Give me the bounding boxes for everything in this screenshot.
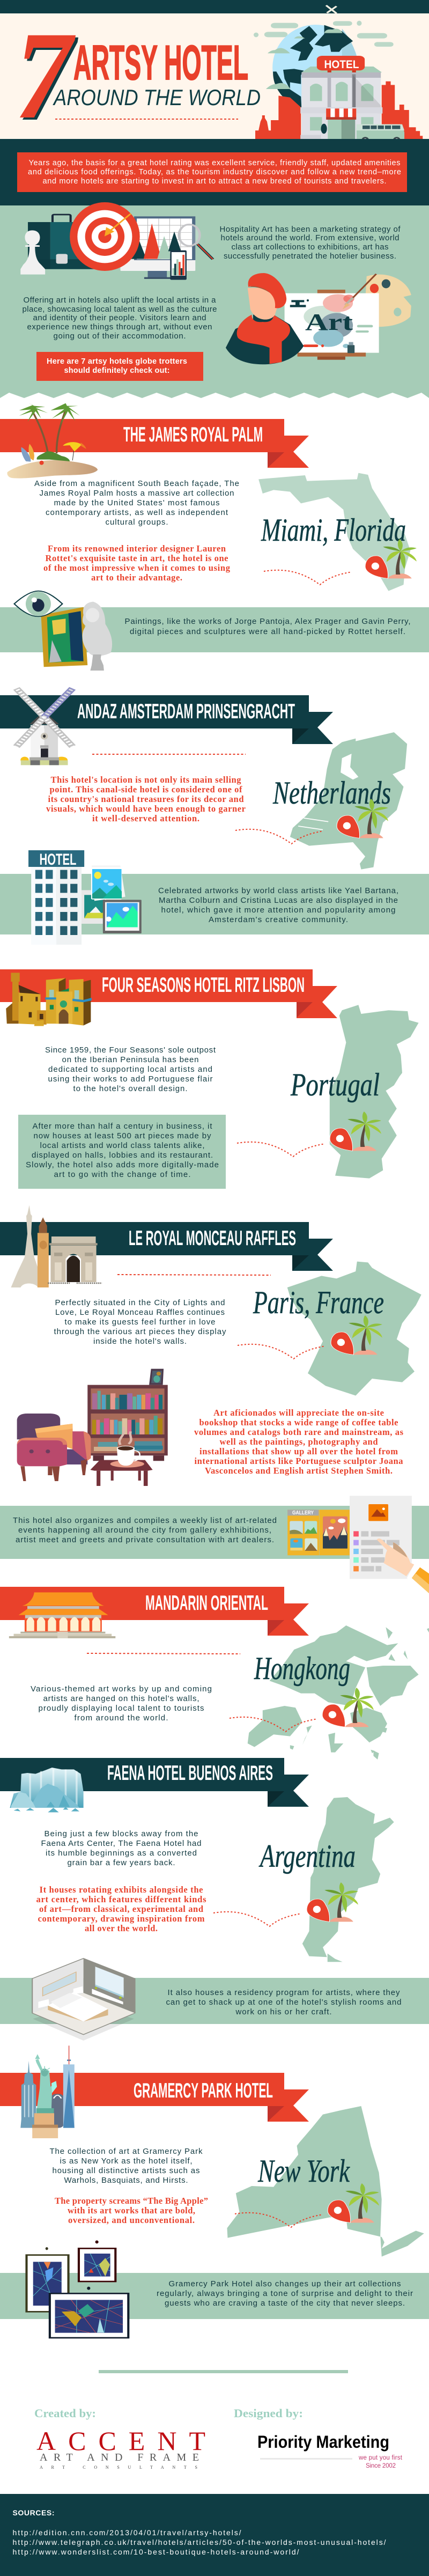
- text: hospitality art: [220, 225, 401, 261]
- intro callout: and delicious food offerings. Today, as the tourism industry discover and follow a new trend–more: [28, 168, 401, 176]
- map pin with palm: [330, 1112, 381, 1151]
- intro callout: and more hotels are starting to invest in art to attract a new breed of tourists and travelers.: [43, 177, 386, 186]
- text: canal-side highlight: its country's national treasures for its decor and: [48, 794, 243, 804]
- text panel: half a century: Slowly, the hotel also adds more digitally-made: [26, 1160, 219, 1169]
- text: celebrated artworks: Celebrated artworks by world class artists like Yael Bartana,: [158, 886, 398, 895]
- text: james royal palm intro: Aside from a magnificent South Beach façade, The: [34, 479, 239, 488]
- banner: faena hotel buenos aires: [0, 1758, 309, 1807]
- text: art aficionados highlight: international artists like Portuguese sculptor Joana: [194, 1456, 403, 1466]
- text: city of lights: through the various art pieces they display: [54, 1327, 226, 1336]
- green band: celebrated artworks: [0, 874, 429, 934]
- dotted route: [237, 1142, 323, 1157]
- text: four seasons intro: Since 1959, the Four Seasons' sole outpost: [45, 1046, 216, 1055]
- location name: portugal: Portugal: [290, 1067, 380, 1102]
- text: residency program: can get to shack up at one of the hotel's stylish rooms and: [166, 1998, 401, 2007]
- text: big apple highlight: The property screams “The Big Apple”: [55, 2196, 208, 2206]
- footer: sources: http://www.telegraph.co.uk/travel/hotels/articles/50-of-the-worlds-most-unusual-hotels/: [13, 2538, 386, 2546]
- text: rotating exhibits highlight: [36, 1885, 206, 1933]
- cream title panel: [0, 13, 429, 139]
- intro callout: [17, 152, 407, 192]
- dashed divider: [55, 119, 238, 120]
- green band: weekly art events: [0, 1506, 429, 1559]
- green band: changing collections: [0, 2273, 429, 2319]
- text: celebrated artworks: [158, 886, 398, 924]
- section: andaz amsterdam prinsengracht: [0, 688, 429, 945]
- label: designed by: Designed by:: [234, 2406, 303, 2420]
- text: james royal palm intro: cultural groups.: [105, 518, 168, 527]
- banner: gramercy park hotel: [0, 2073, 309, 2122]
- footer: sources: http://edition.cnn.com/2013/04/01/travel/artsy-hotels/: [13, 2528, 241, 2537]
- text: rotating exhibits highlight: contemporary, drawing inspiration from: [38, 1913, 205, 1924]
- text panel: half a century: art to go with the change of time.: [54, 1170, 191, 1179]
- illustration: castle: [6, 973, 92, 1026]
- illustration: eye, painting and statue: [14, 591, 112, 671]
- text: offering art: going out of their accommodation.: [54, 332, 186, 341]
- text: lauren rottet highlight: From its renowned interior designer Lauren: [48, 543, 226, 554]
- banner: andaz amsterdam prinsengracht: [0, 695, 333, 744]
- text: residency program: work on his or her craft.: [235, 2007, 331, 2016]
- text: celebrated artworks: hotel, which gave it more attention and popularity among: [161, 906, 396, 915]
- text: lauren rottet highlight: [43, 543, 231, 583]
- logo: accent art and frame: ART CONSULTANTS: [40, 2465, 197, 2470]
- text: faena arts center: Being just a few blocks away from the: [44, 1829, 198, 1838]
- map: florida: [258, 473, 410, 591]
- title number 7: 7: [18, 8, 78, 147]
- text: city of lights: Perfectly situated in the City of Lights and: [55, 1298, 225, 1307]
- illustration: gallery brochure and hand: [287, 1496, 429, 1599]
- text: james royal palm intro: [34, 479, 239, 527]
- illustration: globe, hotel, skyline and van: HOTEL: [324, 58, 359, 71]
- logo: priority marketing: Since 2002: [366, 2463, 396, 2469]
- text: various-themed art: proudly displaying local talent to tourists: [39, 1704, 204, 1713]
- text: art aficionados highlight: volumes and catalogs both rare and mainstream, as: [194, 1427, 404, 1437]
- text: big apple highlight: oversized, and unconventional.: [68, 2215, 195, 2225]
- text: city of lights: to make its guests feel further in love: [64, 1318, 216, 1327]
- map: france: [287, 1262, 421, 1396]
- map pin with palm: [307, 1882, 358, 1922]
- text: hospitality art: Hospitality Art has been a marketing strategy of: [220, 225, 401, 234]
- text: james royal palm intro: contemporary artists, as well as independent: [46, 508, 228, 517]
- text: art aficionados highlight: bookshop that stocks a wide range of coffee table: [199, 1417, 398, 1427]
- dotted route: [230, 1717, 316, 1732]
- dotted route: [235, 829, 322, 844]
- text: canal-side highlight: [46, 775, 246, 823]
- logo: accent art and frame: ACCENT: [36, 2426, 205, 2456]
- text: city of lights: inside the hotel's walls.: [93, 1337, 187, 1346]
- map pin with palm: [322, 1688, 374, 1727]
- text: various-themed art: [31, 1684, 212, 1723]
- subtitle: around the world: AROUND THE WORLD: [52, 85, 261, 110]
- illustration: hotel tower and photos: HOTEL: [40, 851, 76, 869]
- text panel: half a century: local artists and world class talents alike,: [40, 1141, 205, 1150]
- illustration: bookshelf, armchair and coffee: [17, 1369, 168, 1486]
- map: argentina: [302, 1797, 394, 1962]
- footer: sources: [0, 2494, 429, 2576]
- map: hong kong: [248, 1625, 429, 1760]
- text: four seasons intro: on the Iberian Peninsula has been: [62, 1055, 198, 1064]
- text: faena arts center: grain bar a few years back.: [68, 1858, 175, 1867]
- text: four seasons intro: to the hotel's overall design.: [73, 1084, 188, 1093]
- logo: accent art and frame: [36, 2426, 205, 2470]
- text: weekly art events: This hotel also organizes and compiles a weekly list of art-related: [13, 1516, 277, 1525]
- illustration: paris monuments: [11, 1205, 102, 1287]
- map pin with palm: [365, 539, 417, 578]
- text: gramercy collection: housing all distinctive artists such as: [53, 2166, 199, 2175]
- illustration: new york landmarks: [20, 2045, 75, 2138]
- logo: accent art and frame: ART AND FRAME: [40, 2452, 199, 2463]
- top dark bar: [0, 0, 429, 13]
- text: changing collections: regularly, always bringing a tone of surprise and delight to their: [157, 2289, 413, 2298]
- green band: residency program: [0, 1978, 429, 2024]
- map: new york: [227, 2106, 424, 2257]
- text: faena arts center: its humble beginnings as a converted: [46, 1849, 197, 1858]
- banner: the james royal palm: THE JAMES ROYAL PALM: [123, 423, 263, 446]
- dotted route: [235, 2213, 321, 2227]
- dashed divider: [87, 1653, 240, 1654]
- text: offering art: and identity of their people. Visitors learn and: [33, 313, 206, 322]
- label: created by: Created by:: [34, 2406, 96, 2420]
- location name: netherlands: Netherlands: [272, 775, 391, 811]
- logo: priority marketing: we put you first: [358, 2455, 403, 2461]
- text: paintings: [124, 617, 411, 636]
- section: gramercy park hotel: [0, 2045, 429, 2338]
- banner: four seasons hotel ritz lisbon: [0, 969, 337, 1018]
- footer: sources: SOURCES:: [13, 2508, 55, 2517]
- text: city of lights: [54, 1298, 226, 1346]
- text: james royal palm intro: made by the United States' most famous: [54, 498, 220, 507]
- text: hospitality art: class art collections to exhibitions, art has: [232, 242, 388, 252]
- text: lauren rottet highlight: Rottet's exquisite taste in art, the hotel is one: [45, 553, 228, 563]
- title number 7: 7: [15, 5, 76, 145]
- text: various-themed art: artists are hanged on this hotel's walls,: [43, 1694, 199, 1703]
- section: hospitality art: [0, 202, 429, 398]
- text: art aficionados highlight: [194, 1408, 404, 1476]
- text: canal-side highlight: point. This canal-side hotel is considered one of: [49, 784, 242, 794]
- text: hospitality art: hotels around the world. From extensive, world: [221, 233, 399, 242]
- logo: priority marketing: Priority Marketing: [257, 2432, 389, 2452]
- section: four seasons hotel ritz lisbon: [0, 969, 419, 1189]
- green band: paintings: [0, 607, 429, 652]
- text: art aficionados highlight: Vasconcelos and English artist Stephen Smith.: [205, 1466, 393, 1476]
- banner: le royal monceau raffles: [0, 1222, 333, 1271]
- map pin with palm: [331, 1315, 382, 1355]
- callout: 7 artsy hotels: Here are 7 artsy hotels globe trotters: [47, 357, 187, 366]
- illustration: palm island: [7, 403, 98, 479]
- text: canal-side highlight: This hotel's location is not only its main selling: [50, 775, 241, 785]
- text: offering art: [23, 296, 217, 341]
- dashed divider: [92, 754, 246, 755]
- divider bar: [99, 2370, 348, 2373]
- text: gramercy collection: Warhols, Basquiats, and Hirsts.: [64, 2176, 188, 2185]
- section: the james royal palm: [0, 403, 429, 671]
- dotted route: [213, 1912, 300, 1926]
- text: rotating exhibits highlight: It houses rotating exhibits alongside the: [40, 1885, 203, 1895]
- callout: 7 artsy hotels: should definitely check out:: [64, 366, 169, 375]
- illustration: glacier: [10, 1768, 84, 1812]
- text: big apple highlight: with its art works that are bold,: [68, 2205, 195, 2216]
- section: le royal monceau raffles: [0, 1205, 429, 1599]
- text: offering art: place, showcasing local talent as well as the culture: [23, 305, 217, 314]
- text: lauren rottet highlight: art to their advantage.: [91, 572, 182, 583]
- text: weekly art events: events happening all around the city from gallery exhhibitions,: [18, 1526, 271, 1535]
- footer: sources: http://www.wonderslist.com/10-best-boutique-hotels-around-world/: [13, 2548, 299, 2556]
- illustration: hotel tower and photos: [28, 850, 142, 945]
- map: portugal: [330, 1005, 419, 1179]
- banner: gramercy park hotel: GRAMERCY PARK HOTEL: [134, 2079, 273, 2102]
- text: paintings: digital pieces and sculptures were all hand-picked by Rottet herself.: [130, 627, 405, 636]
- illustration: windmill: [17, 688, 72, 765]
- text: faena arts center: [41, 1829, 202, 1867]
- text: city of lights: Love, Le Royal Monceau Raffles continues: [55, 1308, 225, 1317]
- banner: mandarin oriental: [0, 1587, 309, 1636]
- text: various-themed art: from around the world.: [74, 1713, 168, 1723]
- text: offering art: experience new things through art, without even: [27, 322, 212, 332]
- text: art aficionados highlight: installations that show up all over the hotel from: [199, 1446, 398, 1456]
- text: weekly art events: artist meet and greets and private consultation with art dealers.: [16, 1535, 274, 1544]
- text: hospitality art: successfully penetrated the hotelier business.: [224, 252, 396, 261]
- text: residency program: It also houses a residency program for artists, where they: [167, 1988, 400, 1997]
- green background panel with zigzag edge: [0, 205, 429, 398]
- text: rotating exhibits highlight: all over the world.: [85, 1923, 158, 1933]
- text: four seasons intro: using their works to add Portuguese flair: [48, 1074, 212, 1084]
- banner: faena hotel buenos aires: FAENA HOTEL BUENOS AIRES: [107, 1762, 273, 1785]
- text: paintings: Paintings, like the works of Jorge Pantoja, Alex Prager and Gavin Perry,: [124, 617, 411, 626]
- text: rotating exhibits highlight: of art—from classical, experimental and: [39, 1904, 203, 1914]
- text: four seasons intro: [45, 1046, 216, 1093]
- illustration: artist with canvas and palette: Art: [305, 309, 353, 335]
- dotted route: [264, 570, 350, 585]
- map pin with palm: [328, 2183, 379, 2222]
- text: changing collections: [157, 2279, 413, 2308]
- text: offering art: Offering art in hotels also uplift the local artists in a: [24, 296, 216, 305]
- dark intro band: [0, 139, 429, 205]
- text: faena arts center: Faena Arts Center, The Faena Hotel had: [41, 1839, 202, 1848]
- text: canal-side highlight: it well-deserved attention.: [92, 813, 199, 823]
- text: celebrated artworks: Martha Colburn and Cristina Lucas are also displayed in the: [159, 896, 398, 905]
- map pin with palm: [337, 799, 388, 838]
- illustration: globe, hotel, skyline and van: [254, 5, 423, 145]
- text panel: half a century: displayed on halls, lobbies and its restaurant.: [32, 1151, 213, 1160]
- text: gramercy collection: The collection of art at Gramercy Park: [49, 2147, 203, 2156]
- intro callout: Years ago, the basis for a great hotel rating was excellent service, friendly staff, updated amenities: [29, 159, 400, 167]
- location name: hongkong: Hongkong: [254, 1651, 350, 1686]
- text: james royal palm intro: James Royal Palm hosts a massive art collection: [40, 489, 234, 498]
- text panel: half a century: After more than half a century in business, it: [32, 1122, 212, 1131]
- illustration: chinese temple: [9, 1592, 115, 1638]
- dotted route: [238, 1344, 324, 1359]
- section: credits: [34, 2370, 403, 2470]
- text: residency program: [166, 1988, 401, 2016]
- logo: priority marketing: [257, 2432, 403, 2469]
- section: mandarin oriental: [0, 1587, 429, 1760]
- illustration: isometric hotel room: [32, 1959, 135, 2041]
- map: netherlands: [290, 732, 407, 870]
- text: gramercy collection: [49, 2147, 203, 2185]
- section: faena hotel buenos aires: [0, 1758, 429, 2041]
- text: art aficionados highlight: Art aficionados will appreciate the on-site: [213, 1408, 384, 1418]
- text: big apple highlight: [55, 2196, 208, 2225]
- text panel: half a century: now houses at least 500 art pieces made by: [33, 1131, 211, 1140]
- text: various-themed art: Various-themed art works by up and coming: [31, 1684, 212, 1694]
- text: lauren rottet highlight: of the most impressive when it comes to using: [43, 563, 231, 573]
- location name: new york: New York: [257, 2153, 350, 2189]
- text: celebrated artworks: Amsterdam's creative community.: [209, 915, 348, 924]
- illustration: framed abstract art: [26, 2240, 128, 2338]
- text: gramercy collection: is as New York as the hotel itself,: [60, 2157, 192, 2166]
- text: rotating exhibits highlight: art center, which features different kinds: [36, 1894, 206, 1904]
- text: art aficionados highlight: well as the paintings, photography and: [220, 1437, 378, 1447]
- text: changing collections: guests who are craving a taste of the city that never sleeps.: [165, 2299, 405, 2308]
- header section: [0, 0, 429, 205]
- text panel: half a century: [18, 1115, 226, 1189]
- title: artsy hotel: ARTSY HOTEL: [73, 36, 248, 90]
- illustration: artist with canvas and palette: [226, 273, 411, 364]
- location name: argentina: Argentina: [258, 1838, 356, 1874]
- illustration: gallery brochure and hand: GALLERY: [292, 1510, 314, 1516]
- callout: 7 artsy hotels: [36, 352, 203, 381]
- banner: mandarin oriental: MANDARIN ORIENTAL: [145, 1592, 268, 1615]
- text: changing collections: Gramercy Park Hotel also changes up their art collections: [168, 2279, 401, 2288]
- text: canal-side highlight: visuals, which would have been enough to garner: [46, 804, 246, 814]
- text: weekly art events: [13, 1516, 277, 1544]
- text: four seasons intro: dedicated to supporting local artists and: [48, 1065, 212, 1074]
- location name: paris, france: Paris, France: [253, 1285, 384, 1320]
- banner: the james royal palm: [0, 419, 309, 468]
- illustration: briefcase, pawn, target and monitor: [20, 202, 213, 280]
